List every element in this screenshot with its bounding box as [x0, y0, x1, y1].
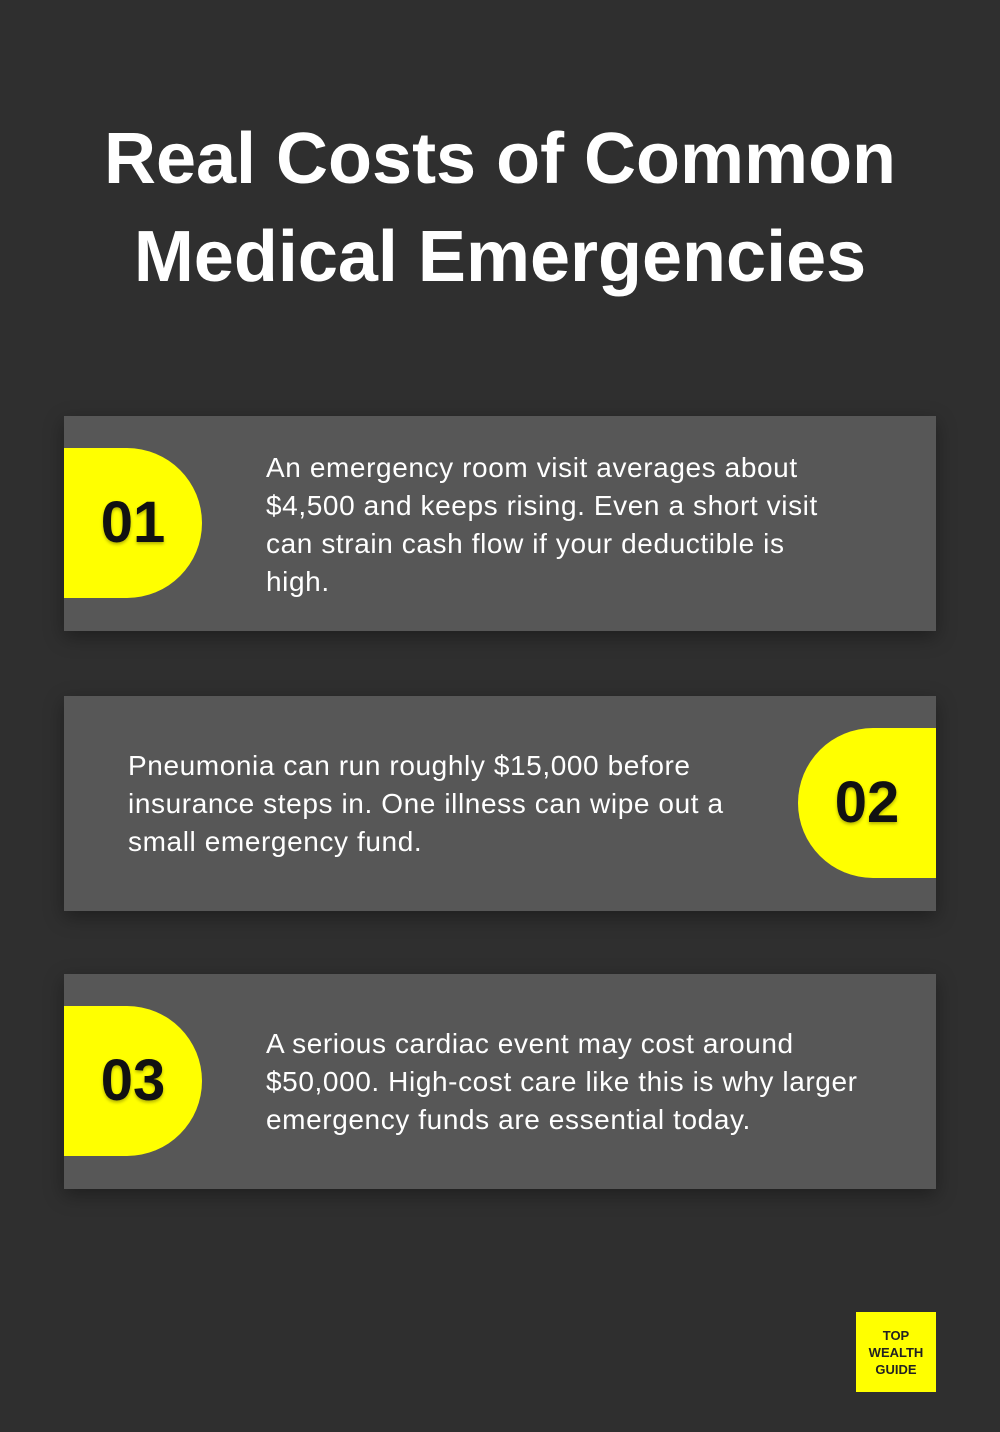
panel: card 01	[64, 416, 936, 631]
text 03: emergency funds are essential today.	[266, 1104, 751, 1135]
text 03	[266, 1028, 858, 1135]
badge 01: 01	[101, 490, 165, 555]
logo	[856, 1312, 936, 1392]
text 02: insurance steps in. One illness can wipe out a	[128, 788, 724, 819]
logo: GUIDE	[875, 1362, 917, 1376]
text 02: small emergency fund.	[128, 826, 422, 857]
logo: TOP	[883, 1328, 909, 1342]
badge 03: 03	[101, 1048, 165, 1113]
badge 03	[64, 1006, 202, 1156]
text 03: A serious cardiac event may cost around	[266, 1028, 794, 1059]
panel: card 03	[64, 974, 936, 1189]
panel: card 02	[64, 696, 936, 911]
title: Real Costs of Common	[104, 119, 896, 199]
text 01: $4,500 and keeps rising. Even a short visit	[266, 490, 818, 521]
title: Medical Emergencies	[134, 217, 866, 297]
text 02: Pneumonia can run roughly $15,000 before	[128, 750, 691, 781]
badge 01	[64, 448, 202, 598]
text 01: high.	[266, 566, 330, 597]
badge 02: 02	[835, 770, 899, 835]
text 03: $50,000. High-cost care like this is why larger	[266, 1066, 858, 1097]
text 01	[266, 452, 818, 597]
logo: WEALTH	[869, 1344, 923, 1360]
badge 02	[798, 728, 936, 878]
title	[104, 119, 896, 297]
text 01: can strain cash flow if your deductible is	[266, 528, 785, 559]
text 02	[128, 750, 724, 857]
text 01: An emergency room visit averages about	[266, 452, 798, 483]
